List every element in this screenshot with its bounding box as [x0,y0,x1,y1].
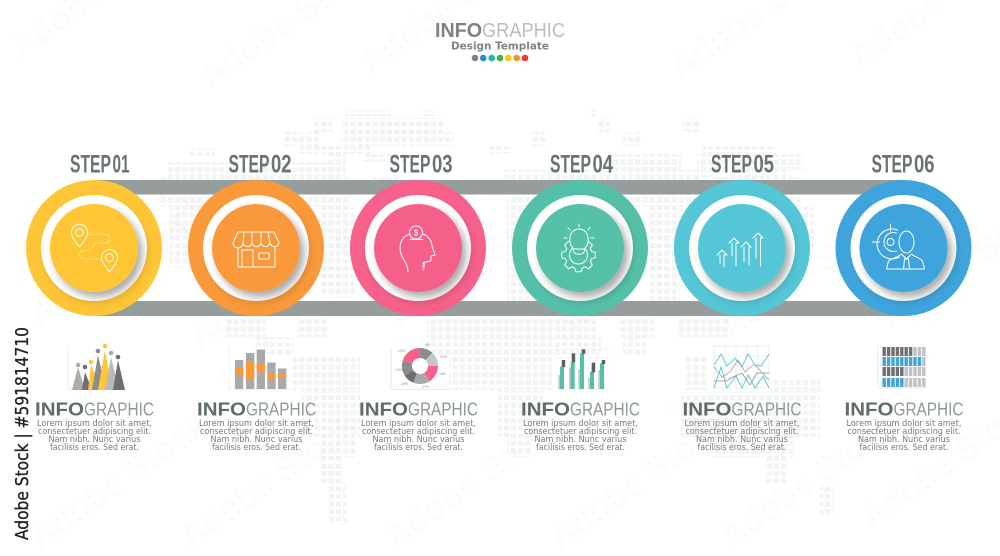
step 3 heading: STEP [390,150,430,178]
title heading: GRAPHIC [482,19,565,42]
step 1 heading: STEP [70,150,111,178]
text block: step 2 caption: consectetuer adipiscing elit. [200,427,313,437]
step 5 heading: STEP [711,150,752,178]
text block: step 4 caption: Lorem ipsum dolor sit amet, [523,419,638,429]
panel: step 6 [836,150,972,316]
panel: step 2 [188,150,324,316]
chart: line graph [714,346,769,388]
text block: step 2 caption: GRAPHIC [246,400,316,420]
text block: step 3 caption [359,400,478,453]
chart: donut: 17% [422,385,429,389]
text block: step 5 caption [682,400,802,453]
text block: step 1 caption: GRAPHIC [84,400,154,420]
background: dotted world map [159,110,833,523]
step 1 heading: 01 [112,150,130,178]
step 4 heading: 04 [592,150,613,178]
chart: mountain peaks [68,344,126,390]
text block: step 4 caption: GRAPHIC [570,400,640,420]
step 2 heading: STEP [228,150,270,178]
text block: step 1 caption: INFO [35,400,84,420]
step 2 heading: 02 [271,150,292,178]
icon: rising arrows [717,233,763,267]
text block: step 5 caption: Lorem ipsum dolor sit amet, [684,419,800,429]
step 5 heading: 05 [754,150,774,178]
chart: people pictogram [878,345,927,388]
text block: step 3 caption: Nam nibh. Nunc varius [372,435,465,445]
text block: step 1 caption: Nam nibh. Nunc varius [48,435,141,445]
step 6 heading: 06 [914,150,934,178]
text block: step 1 caption [35,400,154,453]
text block: step 5 caption: INFO [682,400,732,420]
text block: step 5 caption: consectetuer adipiscing elit. [686,427,798,437]
text block: step 6 caption: Lorem ipsum dolor sit amet, [846,419,962,429]
side credit text: Adobe Stock | #591814710 [13,327,33,540]
text block: step 5 caption: facilisis eros. Sed erat. [698,443,786,453]
step 2 circle with shop icon [188,180,324,316]
icon: bulb and gear [562,224,595,272]
text block: step 4 caption: facilisis eros. Sed erat. [536,443,625,453]
step 3 circle with head and coin icon [350,180,486,316]
text block: step 6 caption: INFO [844,400,894,420]
chart: stacked bars [229,347,290,389]
text block: step 3 caption: GRAPHIC [408,400,478,420]
text block: step 4 caption: INFO [521,400,570,420]
text block: step 1 caption: consectetuer adipiscing elit. [38,427,151,437]
text block: step 1 caption: facilisis eros. Sed erat. [50,443,139,453]
subtitle: Design Template [451,40,549,52]
chart: donut: 13% [395,368,402,372]
step 6 circle with target and person icon [836,180,972,316]
colour dots [472,55,528,61]
step 5 circle with rising arrows icon [674,180,810,316]
step 1 circle with map route icon [26,180,162,316]
text block: step 6 caption: Nam nibh. Nunc varius [858,435,950,445]
text block: step 6 caption [844,400,964,453]
step 3 heading: 03 [432,150,452,178]
text block: step 4 caption: consectetuer adipiscing elit. [524,427,637,437]
icon: target and businessman [872,224,924,269]
text block: step 4 caption [521,400,640,453]
text block: step 4 caption: Nam nibh. Nunc varius [534,435,627,445]
chart: donut: 10% [401,382,408,386]
step 4 circle with bulb and gear icon [512,180,648,316]
chart: donut: 11% [440,355,447,359]
text block: step 2 caption: Lorem ipsum dolor sit amet, [199,419,314,429]
title heading [435,19,565,42]
text block: step 6 caption: consectetuer adipiscing elit. [848,427,960,437]
chart: donut: 15% [439,372,446,376]
text block: step 6 caption: facilisis eros. Sed erat. [860,443,948,453]
step 6 heading: STEP [872,150,912,178]
chart: donut [391,343,450,390]
text block: step 2 caption: facilisis eros. Sed erat. [212,443,301,453]
step 4 heading: STEP [550,150,591,178]
panel: step 4 [512,150,648,316]
connector bars [94,180,904,316]
text block: step 3 caption: consectetuer adipiscing elit. [362,427,475,437]
panel: step 3 [350,150,486,316]
text block: step 1 caption: Lorem ipsum dolor sit amet, [37,419,152,429]
chart: grouped columns [555,349,612,389]
text block: step 3 caption: facilisis eros. Sed erat. [374,443,463,453]
panel: step 5 [674,150,810,316]
panel: step 1 [26,150,162,316]
icon: head with coin: $ [414,228,419,238]
chart: donut: 6% [425,343,430,347]
text block: step 5 caption: Nam nibh. Nunc varius [696,435,788,445]
icon: shop [233,232,279,267]
chart: donut: 13% [398,349,405,353]
text block: step 2 caption: Nam nibh. Nunc varius [210,435,303,445]
text block: step 3 caption: INFO [359,400,408,420]
text block: step 3 caption: Lorem ipsum dolor sit amet, [361,419,476,429]
text block: step 2 caption [197,400,316,453]
text block: step 5 caption: GRAPHIC [732,400,802,420]
text block: step 2 caption: INFO [197,400,246,420]
title block [435,19,565,61]
text block: step 6 caption: GRAPHIC [894,400,964,420]
title heading: INFO [435,19,482,42]
icon: map route [72,224,118,272]
